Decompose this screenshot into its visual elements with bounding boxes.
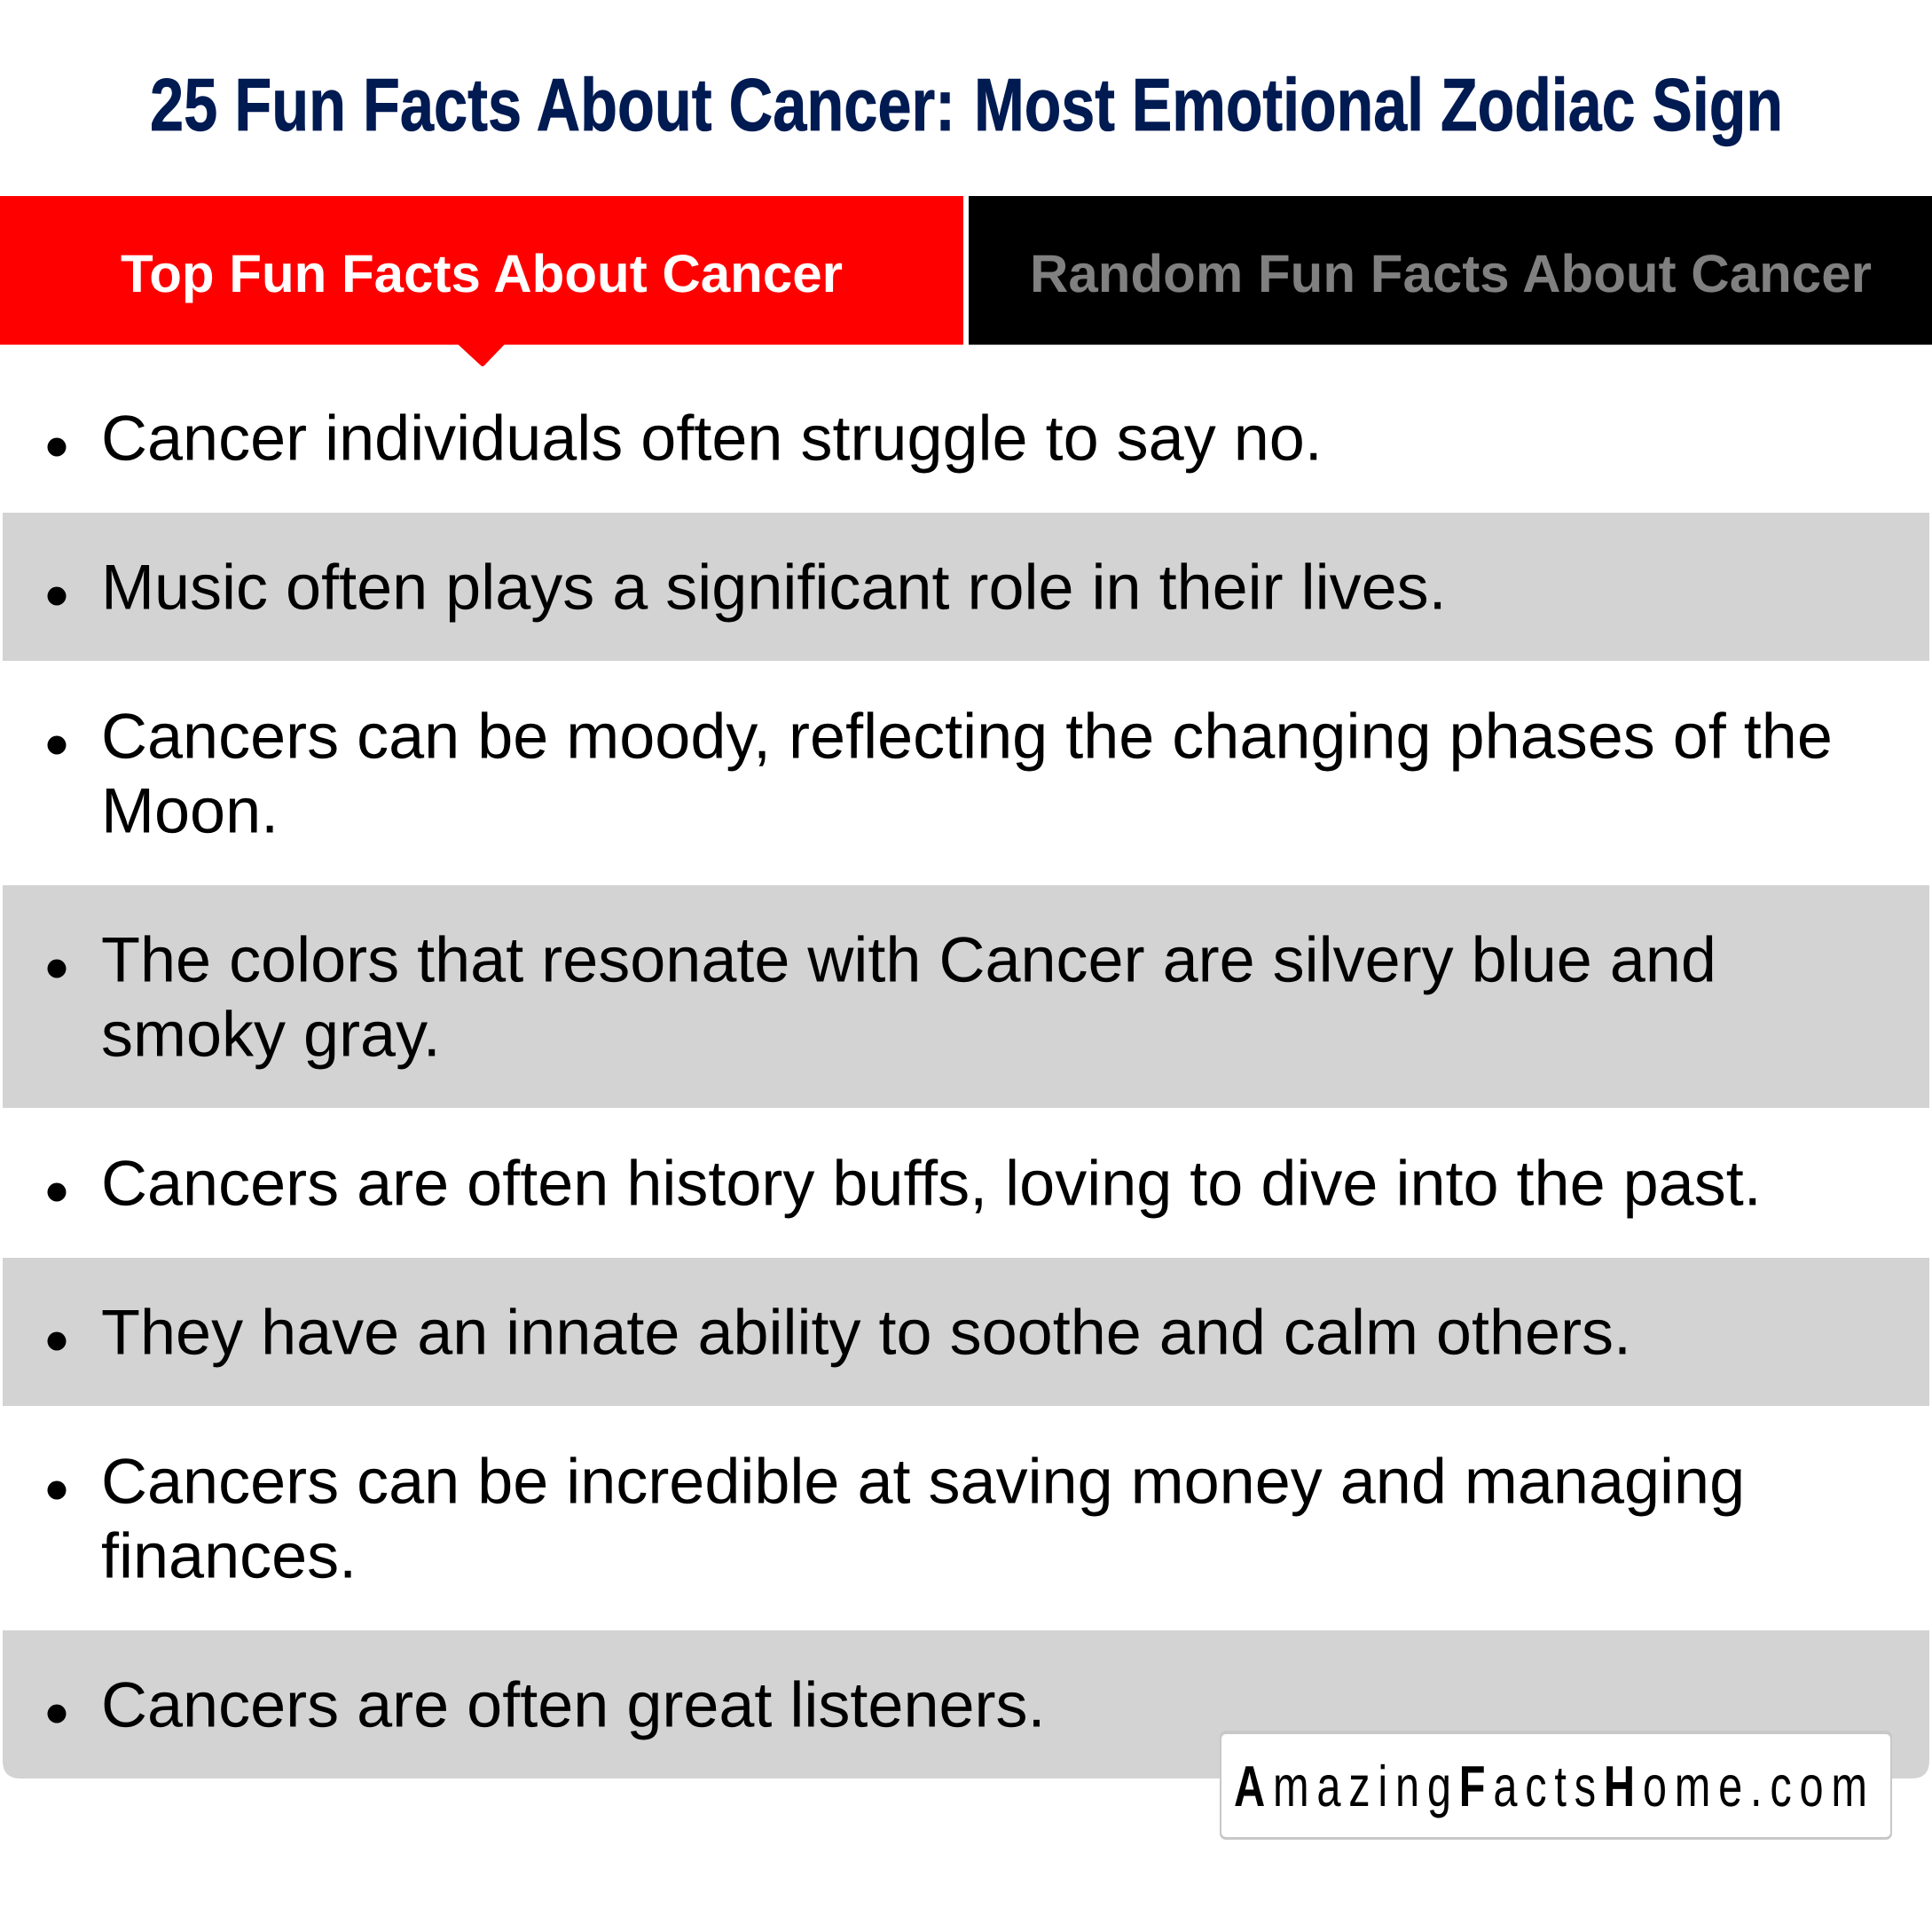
watermark badge: AmazingFactsHome.com [1234, 1754, 1875, 1818]
tab: random fun facts (inactive): Random Fun Facts About Cancer [1030, 244, 1872, 303]
fact 2 row [3, 513, 1929, 661]
title [150, 63, 1783, 146]
fact 6 row [3, 1258, 1929, 1406]
tab: top fun facts (active) [0, 196, 963, 366]
fact 3: Cancers can be moody, reflecting the changing phases of the [101, 701, 1833, 772]
fact 7: Cancers can be incredible at saving money and managing [101, 1446, 1745, 1517]
fact 2 row: Music often plays a significant role in their lives. [101, 552, 1447, 623]
fact 5: Cancers are often history buffs, loving to dive into the past. [101, 1148, 1762, 1219]
watermark badge [1220, 1731, 1892, 1840]
fact 4 row [3, 885, 1929, 1108]
fact 7 [48, 1446, 1745, 1591]
fact 6 row: They have an innate ability to soothe and calm others. [101, 1297, 1631, 1368]
fact 8 row [3, 1630, 1929, 1778]
tab pointer arrow [458, 344, 505, 366]
fact 8 row: Cancers are often great listeners. [101, 1669, 1046, 1740]
fact 3: Moon. [101, 775, 279, 846]
fact list [3, 403, 1929, 1778]
fact 4 row: The colors that resonate with Cancer are silvery blue and [101, 924, 1716, 995]
fact 4 row: smoky gray. [101, 999, 441, 1070]
fact 7: finances. [101, 1520, 357, 1591]
tab: top fun facts (active): Top Fun Facts About Cancer [121, 244, 843, 303]
title: 25 Fun Facts About Cancer: [150, 63, 955, 146]
fact 3 [48, 701, 1833, 846]
tab: random fun facts (inactive) [969, 196, 1932, 345]
fact 1: Cancer individuals often struggle to say no. [101, 403, 1323, 474]
